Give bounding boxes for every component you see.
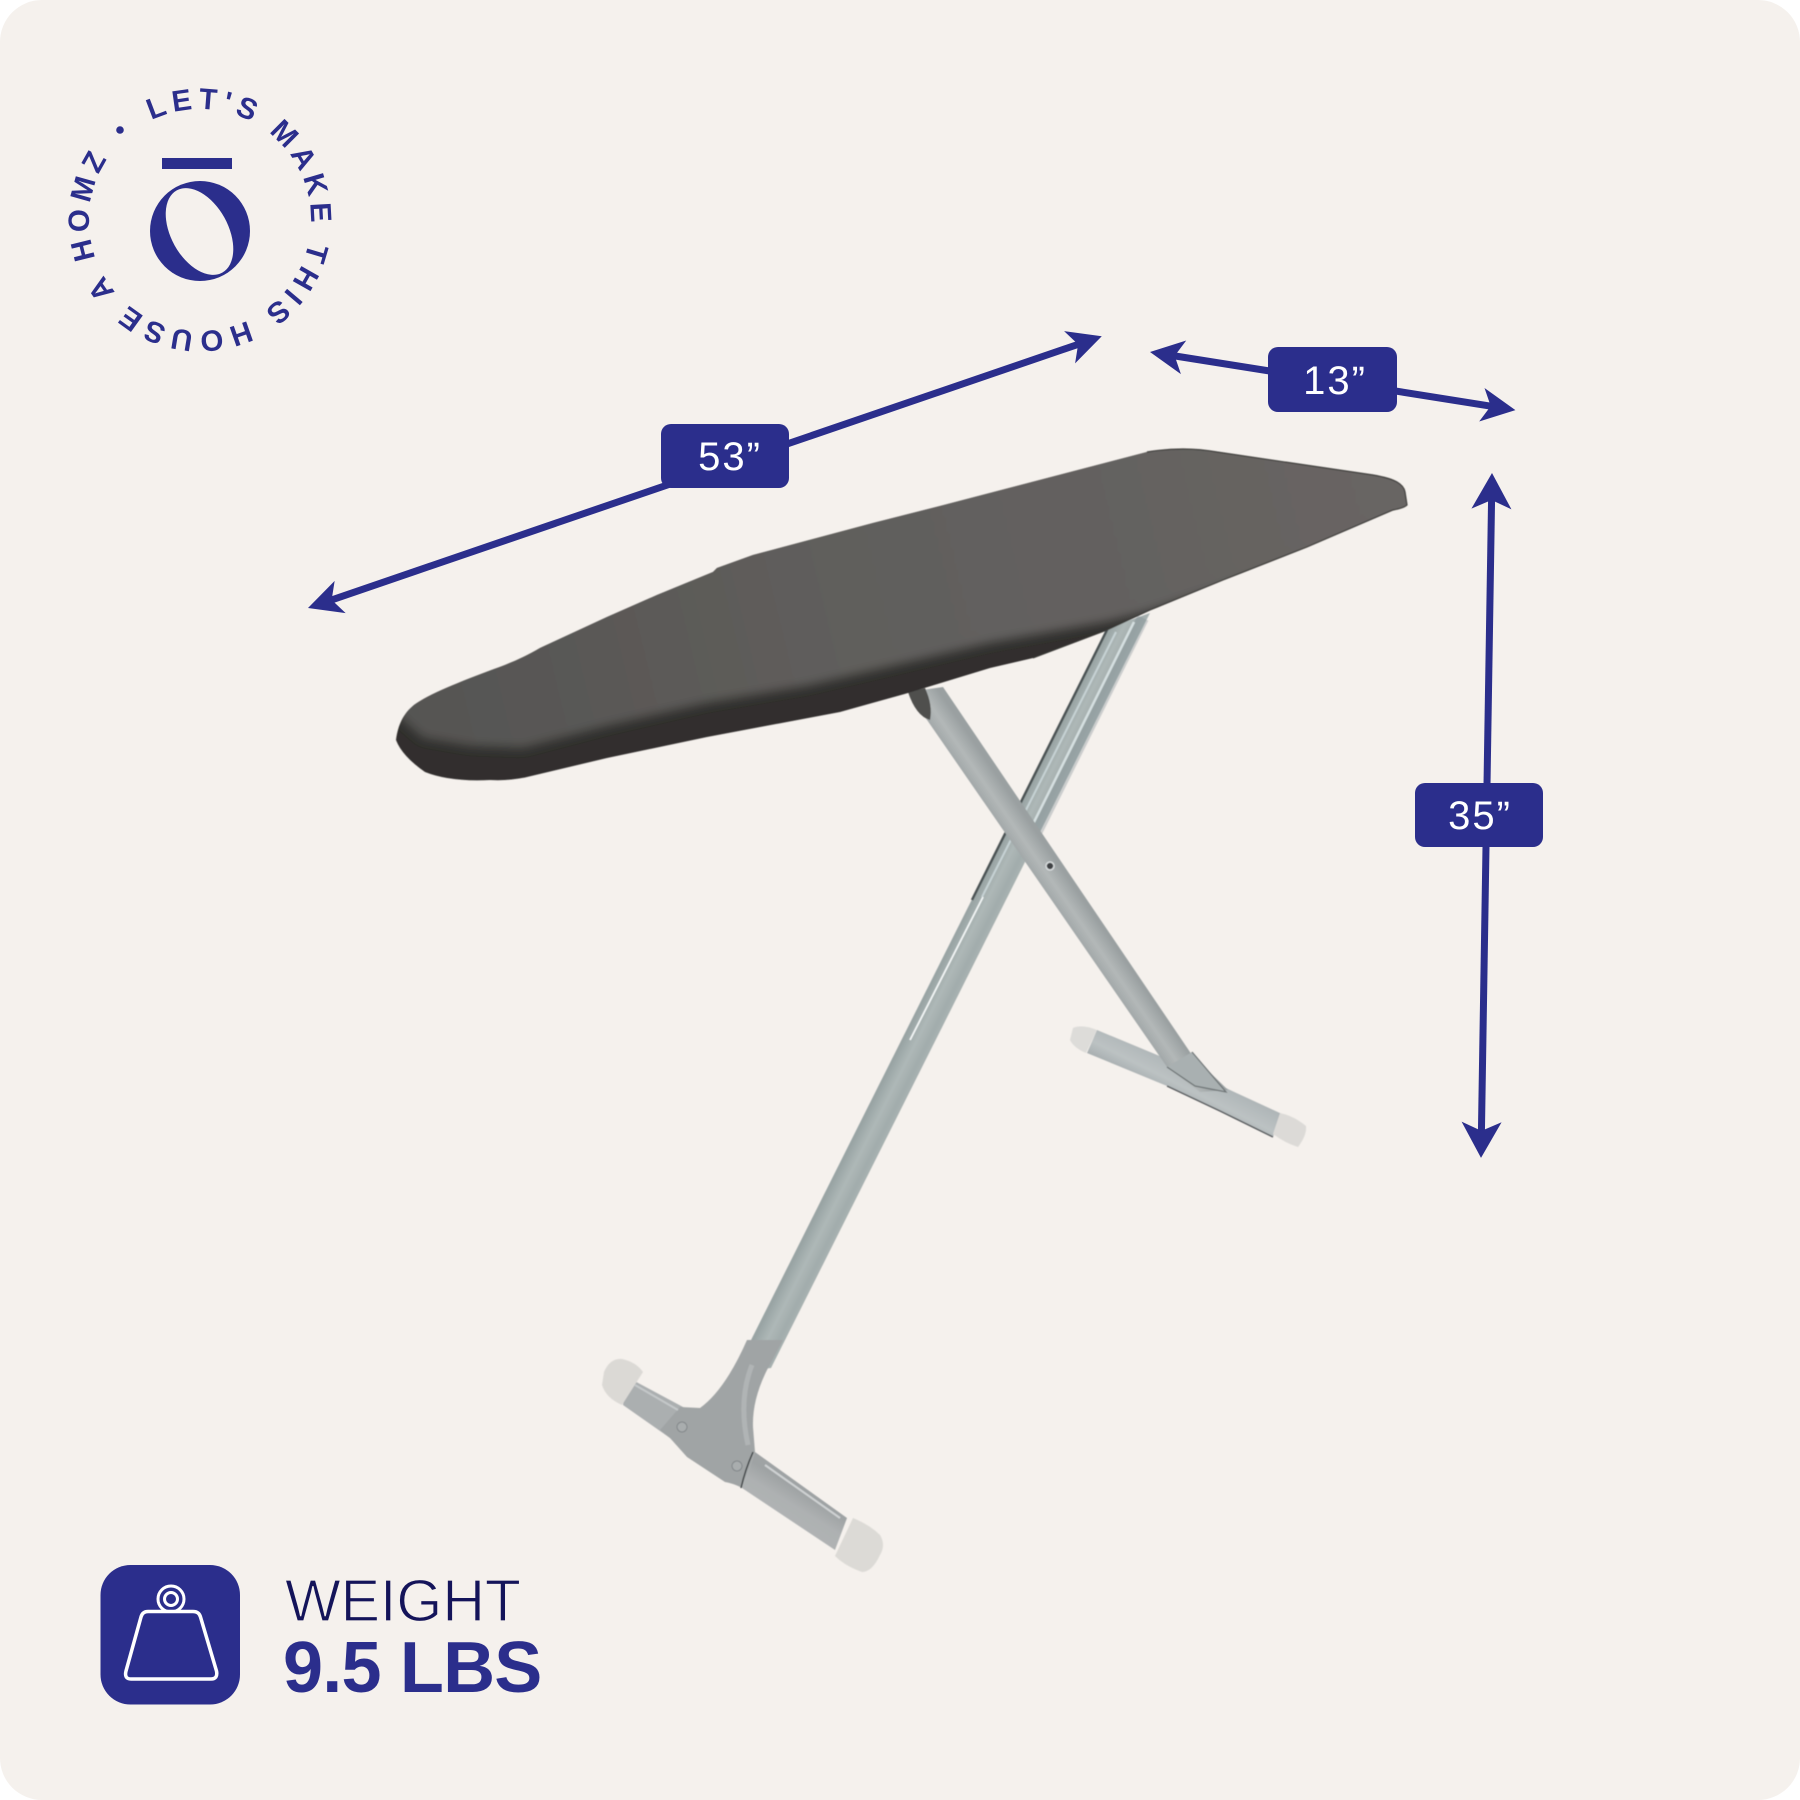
label chip 53: 53” <box>698 435 762 479</box>
joint casting <box>660 1340 783 1488</box>
leg grip <box>908 688 931 720</box>
label chip 13 <box>1268 347 1397 412</box>
logo ring text: LET'S MAKE THIS HOUSE A HOMZ <box>68 88 332 352</box>
long rear leg <box>735 613 1150 1372</box>
board cover <box>395 448 1408 782</box>
arrow: width 13 <box>1147 335 1518 427</box>
rear foot cap right <box>1273 1113 1306 1147</box>
rivets <box>677 1422 687 1432</box>
foot bar left highlight <box>635 1385 678 1410</box>
logo letter O <box>150 177 250 286</box>
logo badge <box>68 88 332 352</box>
board outline <box>1033 449 1407 658</box>
icon: weight <box>100 1565 240 1704</box>
pivot hole <box>1046 862 1054 870</box>
rear foot cap left <box>1070 1026 1097 1053</box>
board side edge <box>395 452 1242 782</box>
label chip 13: 13” <box>1303 359 1367 403</box>
foot bar right <box>742 1452 847 1550</box>
rear foot bar <box>1070 1026 1306 1147</box>
logo macron bar <box>162 158 232 169</box>
logo ring dot <box>116 126 124 134</box>
foot bar left <box>623 1377 700 1445</box>
ironing board product <box>380 420 1430 1572</box>
arrow: height 35 <box>1415 473 1543 1158</box>
front foot T-bar <box>602 1340 883 1572</box>
label chip 53 <box>661 424 789 488</box>
foot cap left <box>602 1359 643 1405</box>
foot cap right <box>835 1518 883 1572</box>
arrow: length 53 <box>302 320 1107 624</box>
weight value: 9.5 LBS <box>283 1628 542 1708</box>
weight label: WEIGHT <box>285 1568 521 1634</box>
board top surface <box>400 449 1407 752</box>
front leg <box>908 687 1228 1092</box>
label chip 35 <box>1415 783 1543 847</box>
label chip 35: 35” <box>1448 794 1512 838</box>
